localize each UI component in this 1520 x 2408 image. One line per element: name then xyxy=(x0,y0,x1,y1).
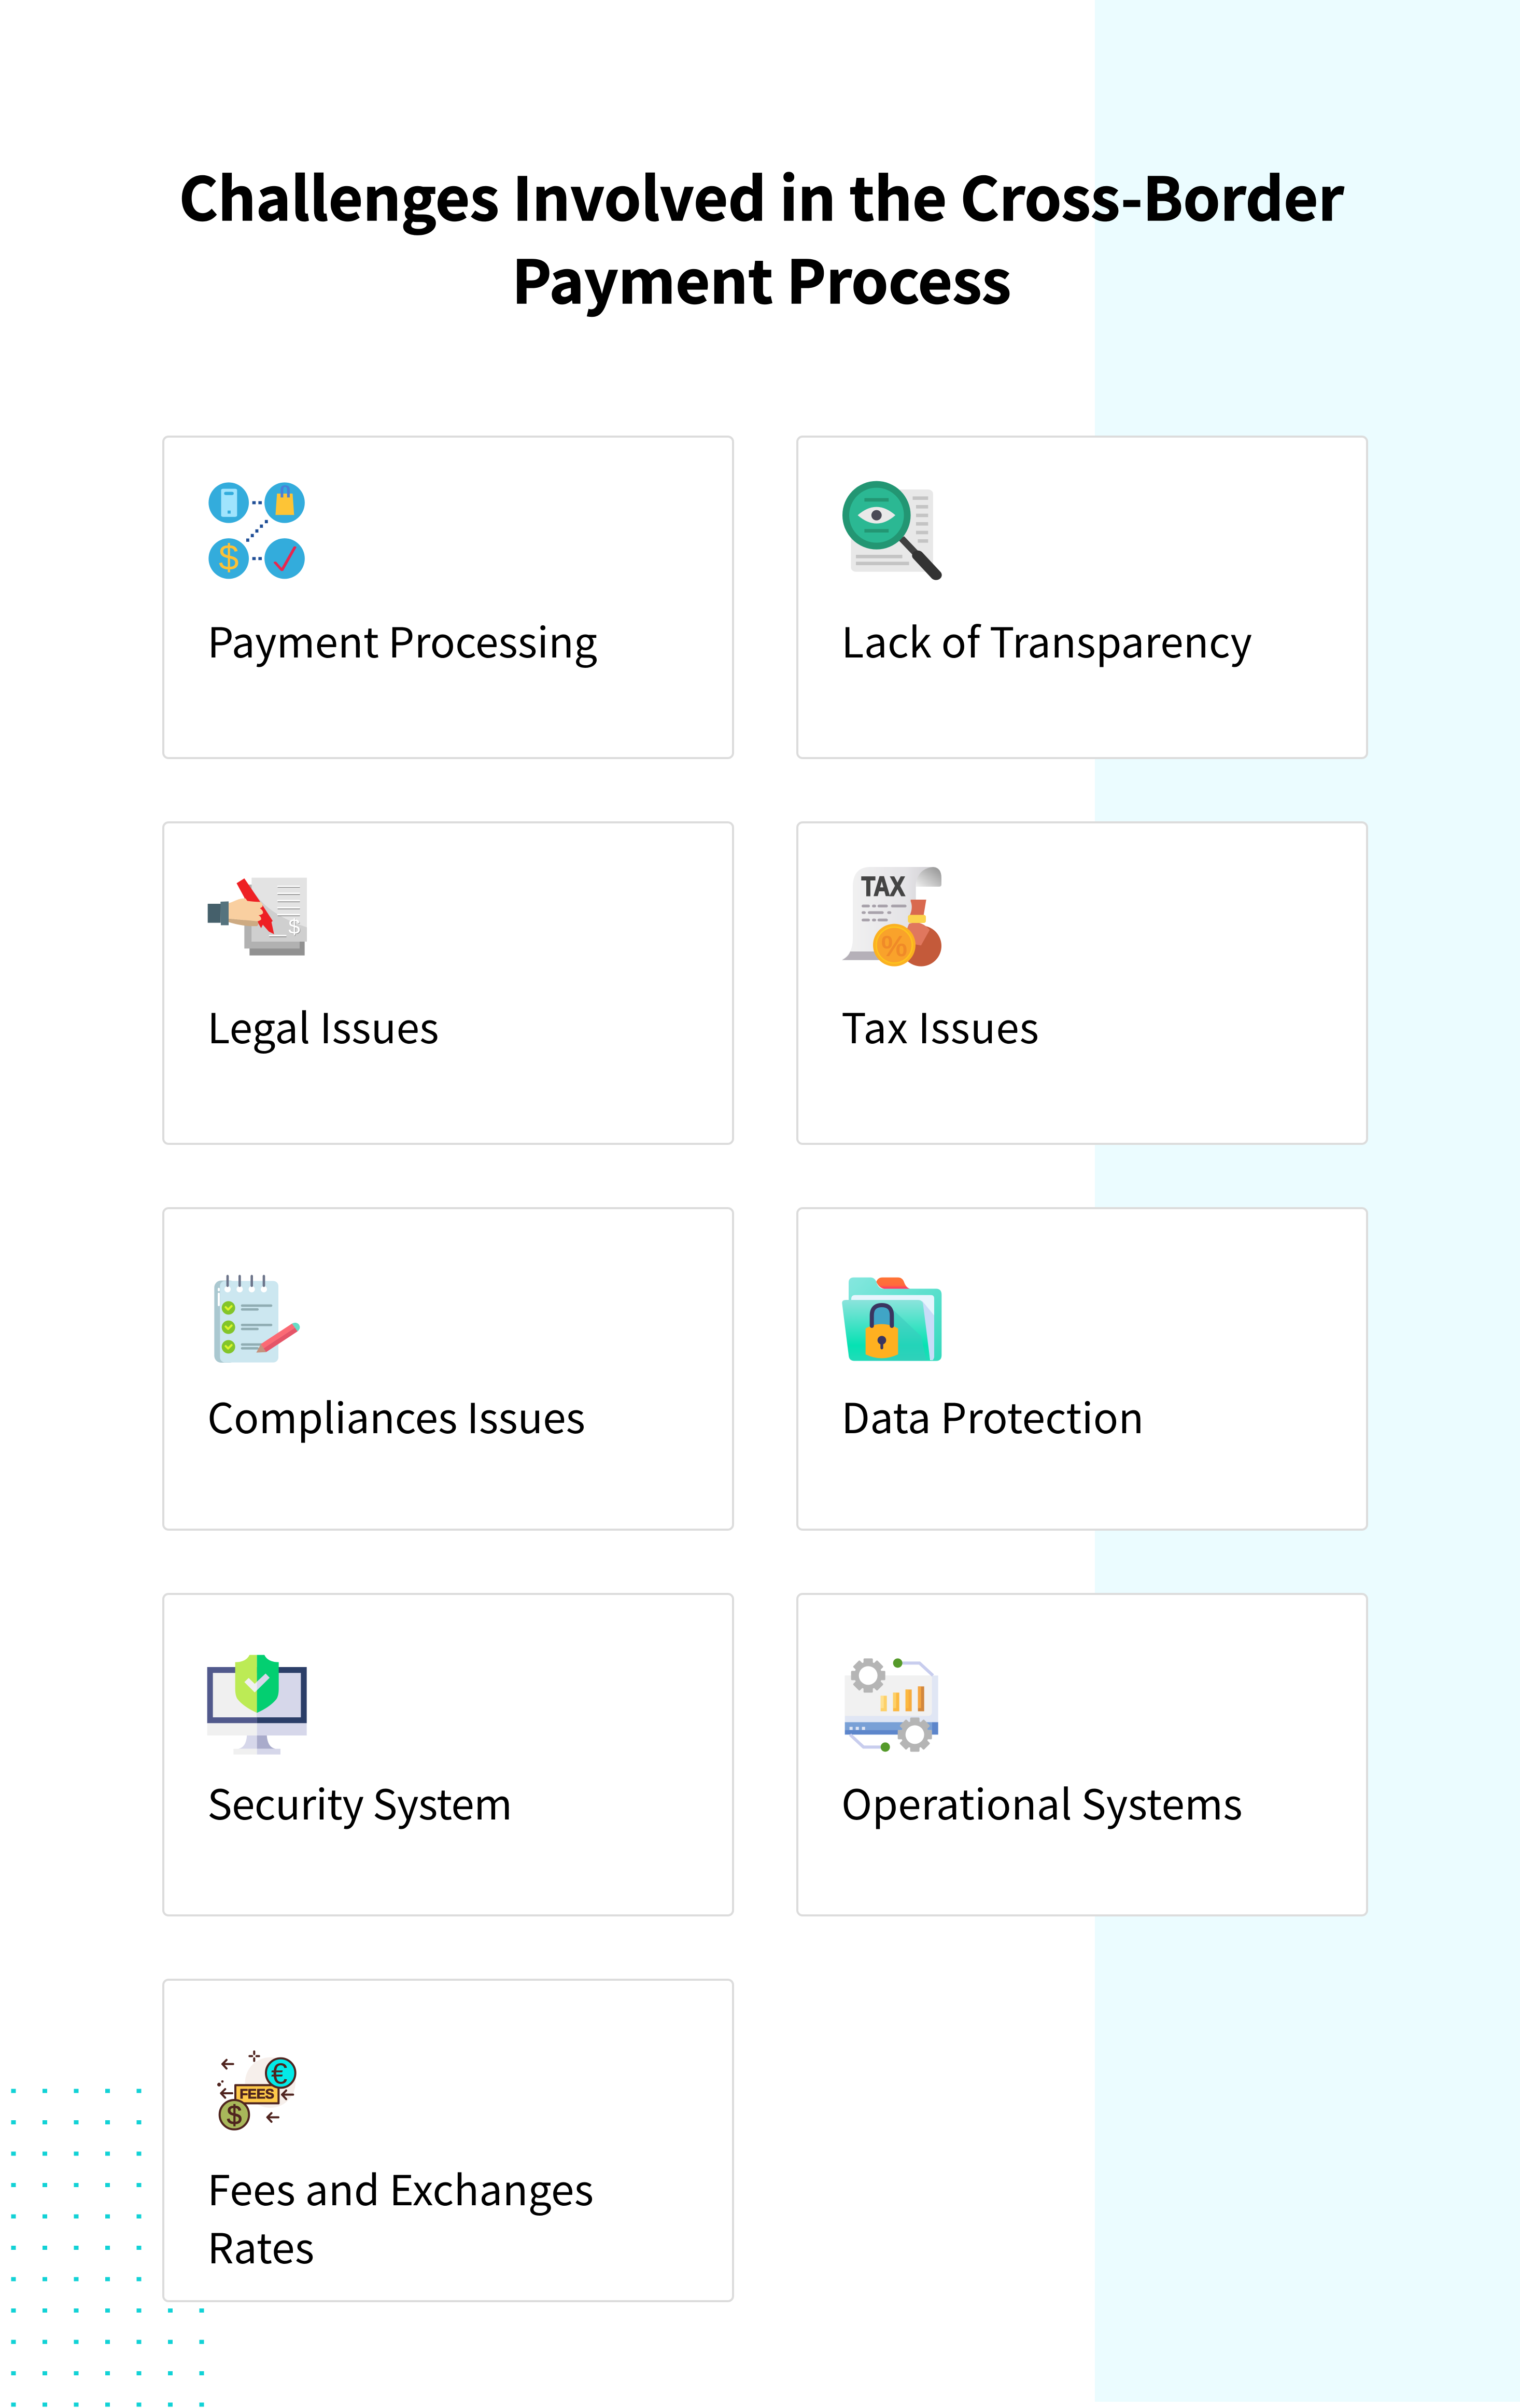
label: Lack of Transparency: Lack of Transparency xyxy=(841,610,1252,670)
card: Tax Issues xyxy=(796,821,1368,1145)
background panel: pale cyan column xyxy=(1095,0,1520,2402)
icon: hand signing document: $ xyxy=(288,915,300,939)
icon: tax scroll with money bag: TAX xyxy=(862,871,905,902)
title xyxy=(179,151,1345,320)
label: Payment Processing: Payment Processing xyxy=(207,610,597,670)
title: Challenges Involved in the Cross-Border xyxy=(179,151,1344,237)
card: Lack of Transparency xyxy=(796,436,1368,759)
icon: payment flow xyxy=(208,482,305,579)
card: Fees and Exchanges Rates xyxy=(162,1979,734,2302)
label: Compliances Issues: Compliances Issues xyxy=(207,1385,585,1446)
icon: monitor with shield xyxy=(207,1655,307,1755)
label: Operational Systems: Operational Systems xyxy=(841,1772,1243,1832)
icon: fees and currency coins xyxy=(217,2050,297,2131)
icon: payment flow: $ xyxy=(219,537,239,578)
icon: magnifier over document xyxy=(842,481,942,580)
dot pattern: bottom-left xyxy=(11,2089,204,2407)
card: Operational Systems xyxy=(796,1593,1368,1916)
label: Data Protection: Data Protection xyxy=(841,1385,1144,1446)
card: Data Protection xyxy=(796,1207,1368,1531)
label: Legal Issues: Legal Issues xyxy=(207,996,439,1056)
icon: dashboard with gears xyxy=(845,1658,938,1752)
card: Legal Issues xyxy=(162,821,734,1145)
label: Security System: Security System xyxy=(207,1772,512,1832)
label: Fees and Exchanges Rates: Rates xyxy=(207,2216,315,2276)
icon: hand signing document xyxy=(207,877,307,956)
title: Payment Process xyxy=(512,234,1011,320)
icon: locked folder xyxy=(842,1278,941,1361)
icon: fees and currency coins: FEES xyxy=(240,2086,274,2102)
icon: fees and currency coins: $ xyxy=(227,2100,242,2130)
card: Compliances Issues xyxy=(162,1207,734,1531)
icon: checklist and pencil xyxy=(214,1275,300,1363)
card: Payment Processing xyxy=(162,436,734,759)
card: Security System xyxy=(162,1593,734,1916)
label: Tax Issues: Tax Issues xyxy=(841,996,1039,1056)
label: Fees and Exchanges Rates: Fees and Exchanges xyxy=(207,2158,594,2218)
icon: fees and currency coins: € xyxy=(271,2058,288,2091)
icon: tax scroll with money bag xyxy=(842,867,941,967)
icon: hand signing document: $ xyxy=(289,915,301,939)
icon: tax scroll with money bag: % xyxy=(881,930,907,963)
label: Fees and Exchanges Rates xyxy=(207,2158,594,2276)
